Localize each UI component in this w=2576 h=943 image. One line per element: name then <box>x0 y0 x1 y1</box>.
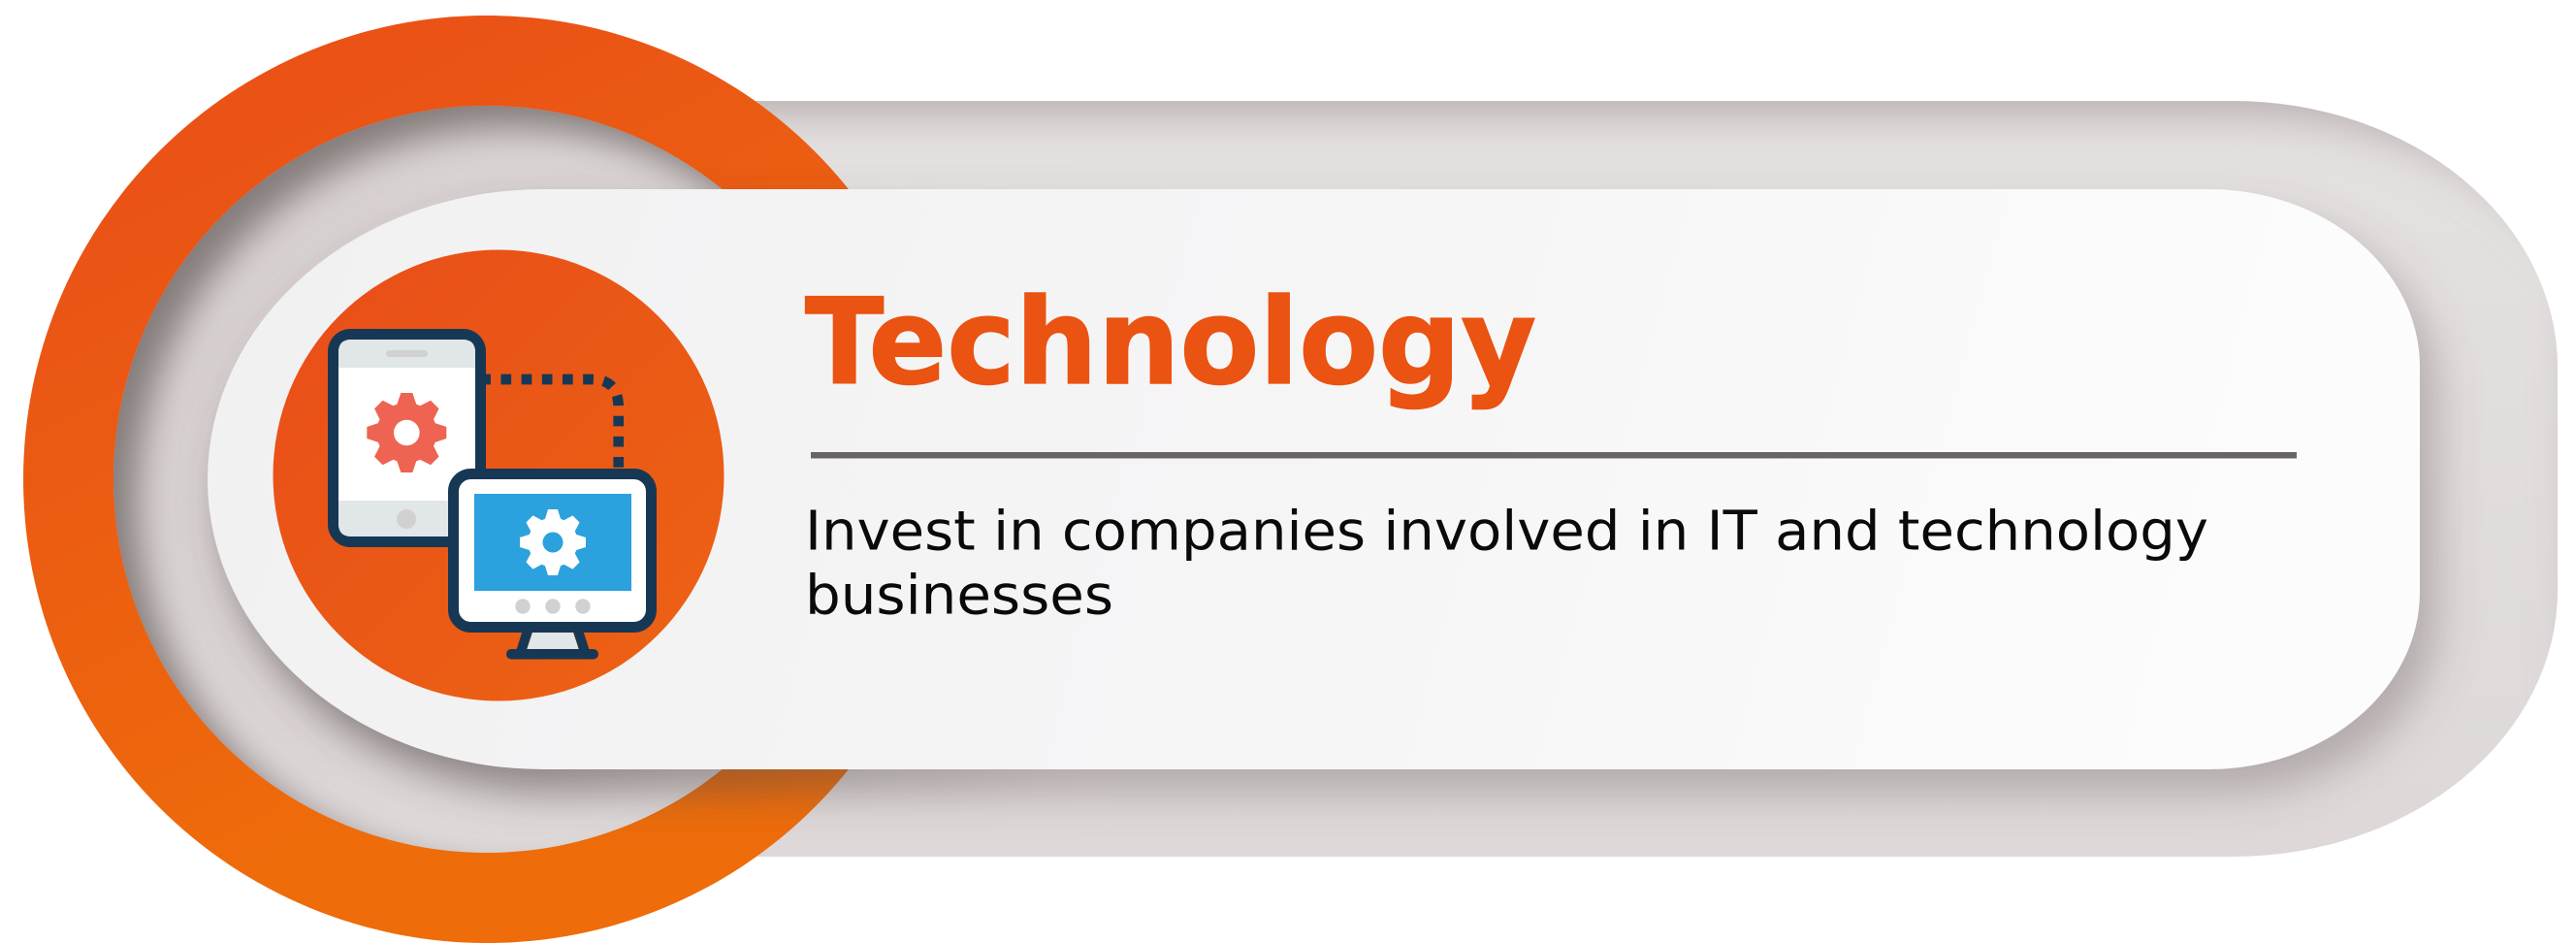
panel drop shadow <box>225 212 2437 793</box>
orange ring <box>23 16 950 943</box>
orange icon disc <box>274 250 724 700</box>
icon: phone and monitor connected <box>334 334 652 660</box>
icon: monitor <box>454 473 652 627</box>
divider rule <box>811 452 2297 458</box>
icon: smartphone <box>334 334 481 541</box>
white content panel <box>208 189 2420 769</box>
description line 1: Invest in companies involved in IT and technology <box>805 501 2208 563</box>
description line 2: businesses <box>805 565 1113 627</box>
title: Technology <box>805 274 1536 411</box>
inner grey circle with inset shadow <box>113 106 722 853</box>
outer grey pill <box>755 101 2558 857</box>
icon: white gear <box>520 509 586 575</box>
dotted connector <box>480 379 619 472</box>
icon: red gear <box>367 393 446 472</box>
icon: monitor stand <box>506 631 598 660</box>
